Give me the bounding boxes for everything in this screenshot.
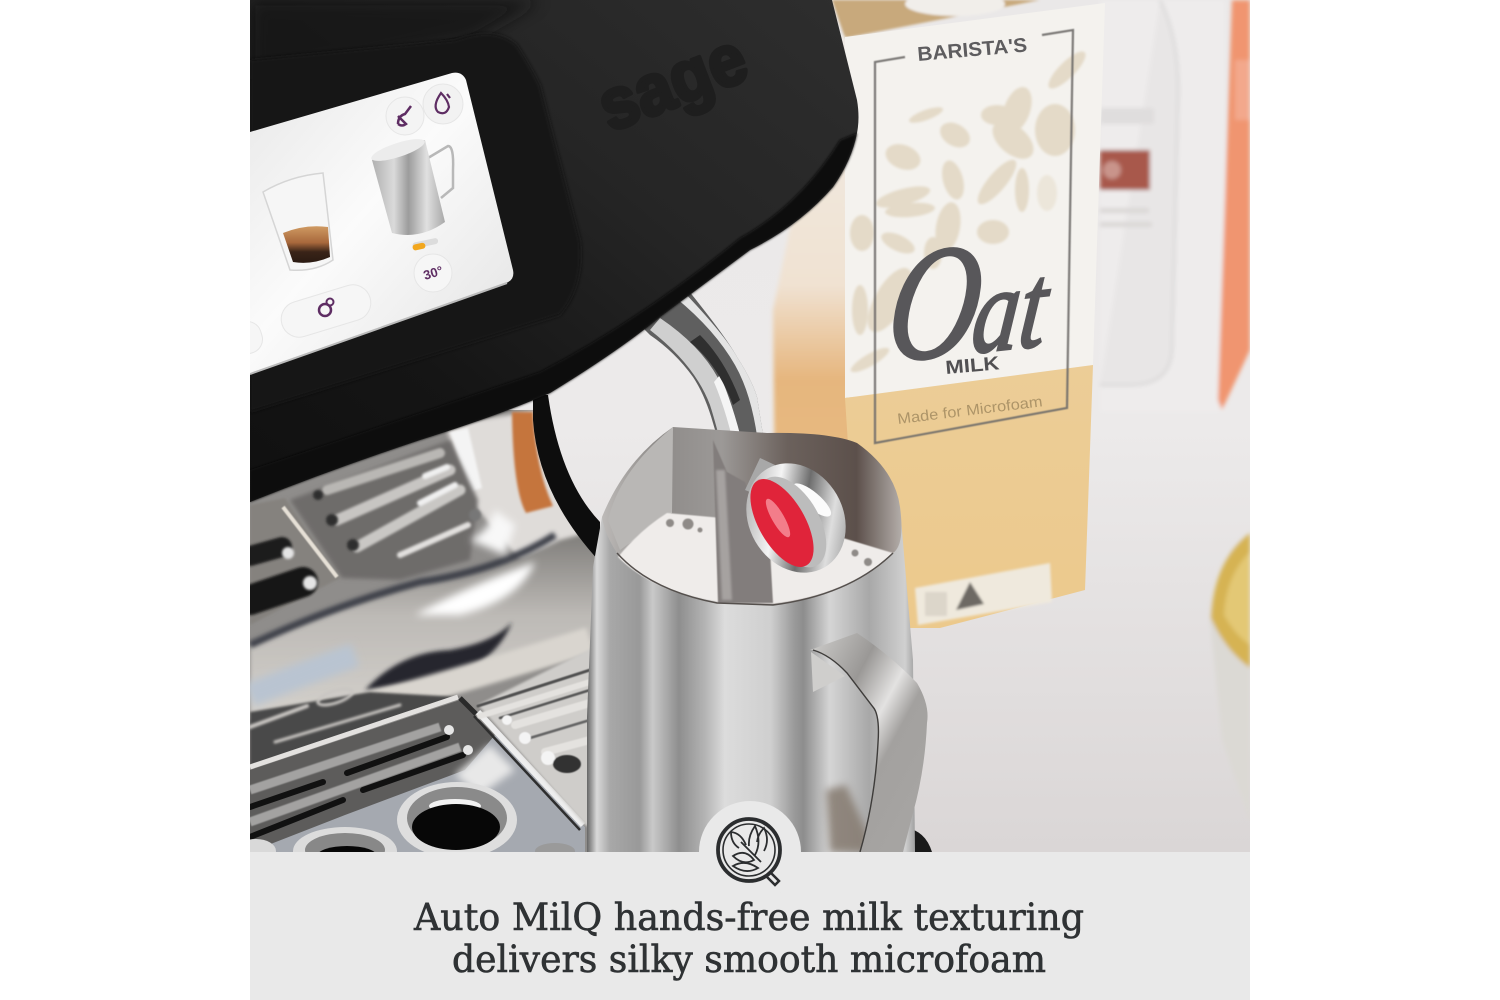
cream panel strip xyxy=(283,507,337,577)
wand chrome tube xyxy=(640,280,767,482)
screen button: flame xyxy=(423,84,463,124)
carton printed frame xyxy=(875,30,1073,443)
carton small white label xyxy=(915,563,1052,625)
oat milk carton xyxy=(773,0,1105,628)
screen surface xyxy=(250,73,513,374)
milk surface xyxy=(618,513,893,604)
rear rib dots xyxy=(502,715,581,773)
tube dark upper swoosh xyxy=(250,535,555,645)
carton gold band xyxy=(845,365,1093,628)
heading line 1: Auto MilQ hands-free milk texturing xyxy=(413,896,1084,939)
mug at right edge xyxy=(1208,532,1250,724)
milk bubbles xyxy=(666,518,872,566)
handle inner edge xyxy=(813,650,878,852)
tray silver plate xyxy=(272,735,585,852)
housing lower edge shade xyxy=(250,133,857,502)
handle tab xyxy=(811,652,845,692)
tube body xyxy=(250,530,598,720)
left panel slots xyxy=(250,547,303,600)
steam wand xyxy=(640,280,767,482)
tray silver bars xyxy=(250,727,460,822)
machine head black housing xyxy=(250,0,858,502)
tray edge strip xyxy=(478,712,583,825)
rib panel xyxy=(290,440,478,580)
jug black base xyxy=(900,828,932,852)
cream lower band xyxy=(370,640,590,705)
milk jug xyxy=(587,427,932,852)
dark reflection xyxy=(365,622,512,690)
carton tagline: Made for Microfoam xyxy=(896,393,1043,428)
screen jug xyxy=(369,135,453,235)
blue-grey band xyxy=(250,655,355,695)
orange reflection xyxy=(512,412,553,513)
drip tray holes xyxy=(397,782,517,858)
background packaging xyxy=(1100,0,1250,412)
white vertical highlight xyxy=(450,428,482,492)
light strips xyxy=(250,686,400,742)
touch screen xyxy=(226,73,513,374)
carton brand text: BARISTA'S xyxy=(917,34,1028,66)
tray white front edge xyxy=(250,697,458,767)
top-left dark shade xyxy=(250,0,540,80)
badge: icon circle xyxy=(699,801,801,903)
carton front white face xyxy=(845,3,1105,398)
chrome base shape xyxy=(250,410,598,860)
jug rim and inner wall xyxy=(602,427,901,605)
jug warm shadow xyxy=(826,785,868,852)
carton milk label: MILK xyxy=(945,353,1001,379)
jug body xyxy=(587,507,915,852)
drip tray xyxy=(250,700,585,844)
carton product name: Oat xyxy=(880,200,1060,397)
carton side face xyxy=(770,35,852,440)
rib end dots xyxy=(313,490,481,551)
red nozzle ring xyxy=(727,445,865,591)
submerged wand reflection xyxy=(713,440,773,603)
jug spout inner shade xyxy=(608,427,673,550)
icon: latte art cup xyxy=(718,819,780,885)
panel: product photo xyxy=(226,0,1250,875)
heading line 2: delivers silky smooth microfoam xyxy=(452,938,1046,981)
screen button: left pill xyxy=(226,318,266,358)
screen button: 30 degrees: 30° xyxy=(421,263,445,283)
ribs xyxy=(327,453,468,555)
screen button: pill xyxy=(277,280,375,342)
upper right pale reflection xyxy=(445,410,579,559)
rear tray ribs xyxy=(478,645,598,830)
band under the tube xyxy=(250,692,460,767)
screen recess xyxy=(250,34,581,412)
drip tray slots xyxy=(250,737,463,837)
screen button: wand xyxy=(386,97,424,135)
machine chrome body xyxy=(236,410,598,875)
jug front rim line xyxy=(617,553,893,605)
left dark panel xyxy=(250,498,340,625)
infographic canvas xyxy=(250,0,1250,1000)
wand highlights xyxy=(676,290,767,462)
logo: sage: sage xyxy=(587,18,758,147)
carton top flap xyxy=(832,0,1040,38)
power cable xyxy=(533,395,600,562)
screen glass with espresso xyxy=(263,173,333,270)
housing outline xyxy=(250,0,858,502)
tube white highlights xyxy=(415,510,535,615)
screen button: 30 degrees xyxy=(414,254,452,292)
screen temperature indicator xyxy=(412,238,439,251)
slot end caps xyxy=(444,725,473,755)
oat flakes xyxy=(848,47,1090,376)
left panel dots xyxy=(282,547,317,590)
panel: caption band xyxy=(250,852,1250,1000)
photo background wall and counter xyxy=(509,0,1250,852)
jug handle xyxy=(810,633,928,852)
